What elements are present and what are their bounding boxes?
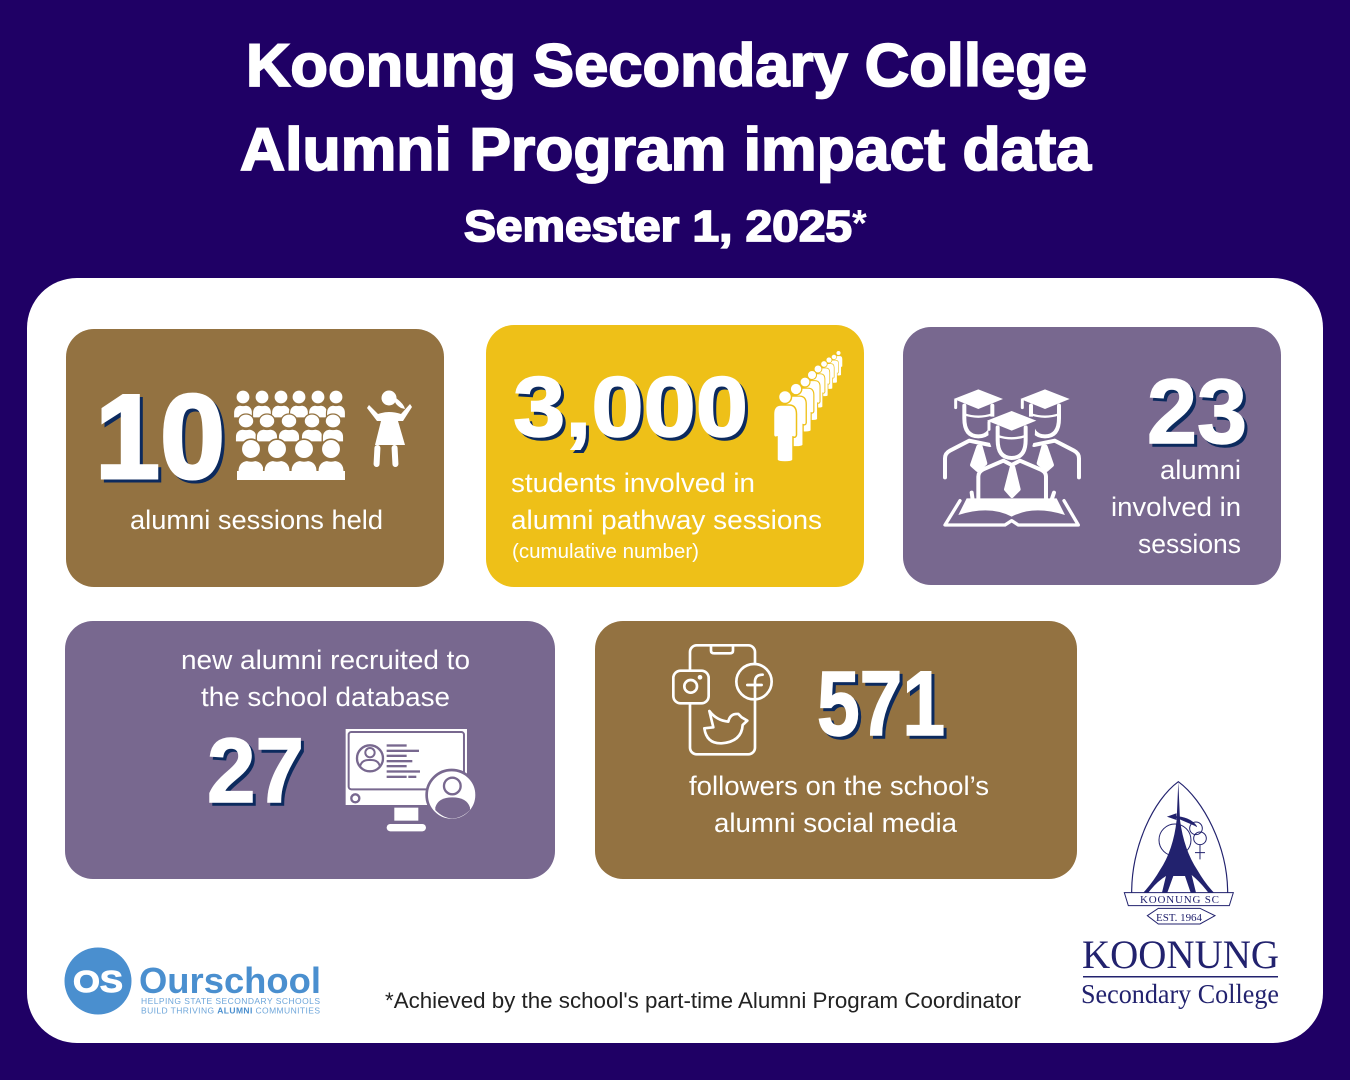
number: 10: 10 bbox=[95, 370, 225, 504]
caption: alumni bbox=[1160, 455, 1241, 485]
logo: Ourschool bbox=[64, 948, 321, 1016]
panel: new alumni recruited: the school database bbox=[201, 682, 450, 712]
crest bbox=[1124, 782, 1233, 924]
panel: alumni sessions held bbox=[66, 329, 444, 587]
number: 3,000: 3,000 bbox=[513, 360, 748, 455]
icon: audience bbox=[234, 390, 346, 480]
logo: Ourschool: HELPING STATE SECONDARY SCHOOLS bbox=[141, 996, 320, 1006]
panel: alumni involved bbox=[903, 327, 1281, 585]
title: Semester 1, 2025 bbox=[464, 202, 852, 251]
caption: alumni sessions held bbox=[130, 505, 383, 535]
icon: graduates with book bbox=[945, 389, 1079, 525]
title: Alumni Program impact data bbox=[240, 116, 1092, 183]
logo: Ourschool: OS bbox=[73, 964, 123, 999]
panel: alumni involved: involved in bbox=[1111, 492, 1241, 522]
number: 23: 23 bbox=[1147, 361, 1247, 463]
number: 27: 27 bbox=[207, 720, 304, 822]
caption: new alumni recruited to bbox=[181, 645, 470, 675]
panel: students involved: alumni pathway sessions bbox=[511, 505, 822, 535]
caption: students involved in bbox=[511, 468, 755, 498]
logo: Koonung Secondary College: KOONUNG bbox=[1082, 932, 1279, 977]
panel: students involved: (cumulative number) bbox=[512, 541, 699, 563]
logo: Koonung Secondary College bbox=[1081, 782, 1279, 1009]
white content panel bbox=[27, 278, 1323, 1043]
panel: social media followers bbox=[595, 621, 1077, 879]
logo: Koonung Secondary College: KOONUNG SC bbox=[1140, 894, 1219, 906]
panel: new alumni recruited bbox=[65, 621, 555, 879]
logo: Ourschool: Ourschool bbox=[139, 960, 321, 1001]
icon: phone with social media bbox=[673, 645, 772, 754]
logo: Koonung Secondary College: EST. 1964 bbox=[1156, 912, 1202, 924]
logo: Koonung Secondary College: Secondary College bbox=[1081, 979, 1279, 1009]
title: * bbox=[852, 203, 867, 245]
panel: social media followers: alumni social media bbox=[714, 808, 958, 838]
logo: Ourschool: BUILD THRIVING ALUMNI COMMUNITIES bbox=[141, 1006, 320, 1016]
title: Koonung Secondary College bbox=[246, 32, 1087, 99]
icon: line of students bbox=[774, 351, 843, 462]
panel: alumni involved: sessions bbox=[1138, 529, 1241, 559]
footnote: *Achieved by the school's part-time Alumni Program Coordinator bbox=[385, 988, 1022, 1013]
number: 571: 571 bbox=[817, 653, 945, 755]
panel: students involved bbox=[486, 325, 864, 587]
icon: teacher bbox=[367, 390, 412, 467]
icon: computer with profile bbox=[346, 729, 477, 831]
title bbox=[240, 32, 1092, 251]
caption: followers on the school’s bbox=[689, 771, 989, 801]
